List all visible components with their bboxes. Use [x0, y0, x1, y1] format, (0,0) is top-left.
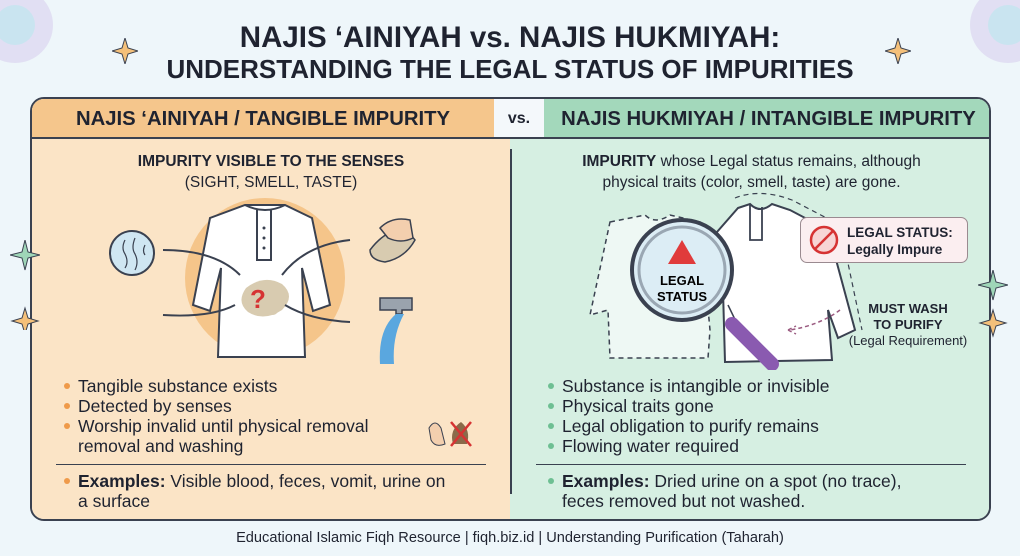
callout: must wash: MUST WASH: [868, 301, 948, 316]
subheading right: [582, 153, 921, 191]
divider: [510, 149, 512, 494]
callout: legal status: LEGAL STATUS:: [847, 225, 953, 240]
title: NAJIS ‘AINIYAH vs. NAJIS HUKMIYAH:: [240, 21, 780, 54]
subheading right: IMPURITY whose Legal status remains, although: [582, 153, 921, 170]
decorative side stars: [10, 240, 40, 330]
bullets left: removal and washing: [78, 436, 243, 456]
illustration: intangible shirts and magnifier: [590, 192, 863, 370]
examples left: a surface: [78, 491, 150, 511]
icon: sparkle left: [112, 38, 138, 64]
examples right: feces removed but not washed.: [562, 491, 805, 511]
bullets right: Legal obligation to purify remains: [562, 416, 819, 436]
panel: tangible: [32, 99, 510, 523]
panel: intangible: [510, 99, 993, 523]
illustration: tangible shirt with senses: ?: [250, 284, 266, 314]
callout: must wash: TO PURIFY: [873, 317, 943, 332]
header vs: [494, 99, 544, 139]
illustration: tangible shirt with senses: [109, 198, 416, 364]
callout: legal status: [800, 217, 968, 263]
icon: hand and crossed feces: [428, 421, 472, 447]
subheading left: (SIGHT, SMELL, TASTE): [185, 174, 357, 191]
bullets left: Worship invalid until physical removal: [78, 416, 368, 436]
title: UNDERSTANDING THE LEGAL STATUS OF IMPURITIES: [166, 54, 854, 84]
header right: NAJIS HUKMIYAH / INTANGIBLE IMPURITY: [561, 108, 976, 130]
footer: Educational Islamic Fiqh Resource | fiqh.biz.id | Understanding Purification (Taharah): [236, 530, 784, 546]
icon: sparkle right: [885, 38, 911, 64]
subheading left: IMPURITY VISIBLE TO THE SENSES: [138, 153, 404, 170]
bullets right: [548, 376, 830, 456]
header right: [544, 99, 993, 139]
bullets right: Substance is intangible or invisible: [562, 376, 830, 396]
header vs: vs.: [508, 110, 530, 127]
bullets right: Physical traits gone: [562, 396, 714, 416]
examples left: [56, 464, 486, 511]
subheading right: physical traits (color, smell, taste) are gone.: [602, 174, 901, 191]
header left: NAJIS ‘AINIYAH / TANGIBLE IMPURITY: [76, 108, 450, 130]
examples right: [536, 464, 966, 511]
header left: [32, 99, 494, 139]
illustration: intangible shirts and magnifier: STATUS: [657, 289, 707, 304]
illustration: intangible shirts and magnifier: LEGAL: [660, 273, 704, 288]
callout: legal status: Legally Impure: [847, 242, 942, 257]
title: [166, 21, 854, 84]
bullets left: Detected by senses: [78, 396, 232, 416]
bullets left: Tangible substance exists: [78, 376, 277, 396]
decorative corner right: [970, 0, 1020, 63]
decorative corner left: [0, 0, 53, 63]
callout: must wash: (Legal Requirement): [849, 333, 967, 348]
callout: must wash: [849, 301, 967, 348]
card: [30, 97, 991, 521]
examples right: Examples: Dried urine on a spot (no trace),: [562, 471, 901, 491]
examples left: Examples: Visible blood, feces, vomit, urine on: [78, 471, 445, 491]
bullets right: Flowing water required: [562, 436, 739, 456]
subheading left: [138, 153, 404, 191]
bullets left: [64, 376, 368, 456]
